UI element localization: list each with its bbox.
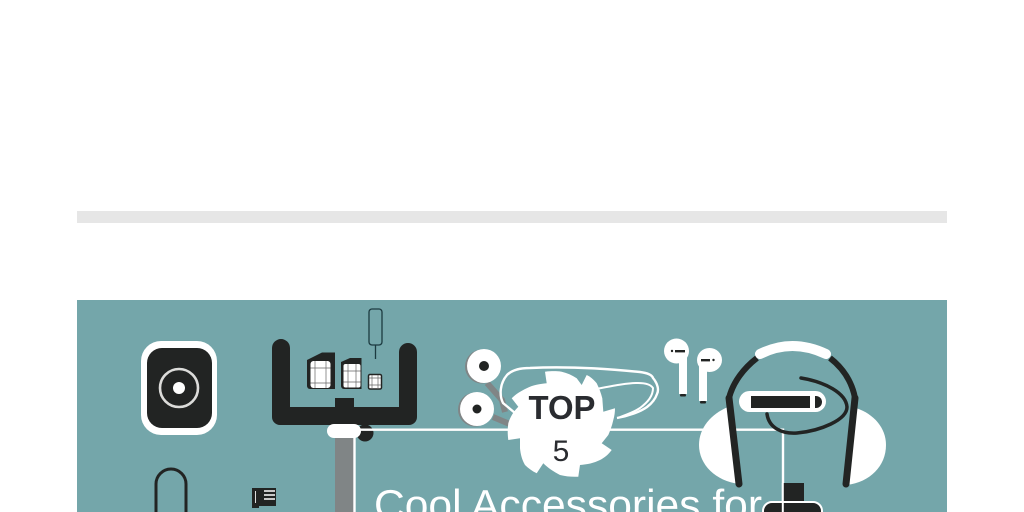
icon: USB connector <box>763 483 822 512</box>
icon: camera lens <box>141 341 217 435</box>
icon: earphones <box>458 349 658 426</box>
icon: SIM cards <box>307 352 382 389</box>
icon: micro SD card <box>252 488 276 508</box>
icon: SIM eject pin <box>369 309 382 359</box>
icon: headphones <box>699 346 886 485</box>
frame lines <box>354 430 783 512</box>
teal panel <box>77 300 947 512</box>
icon: selfie stick <box>272 339 417 512</box>
icon: paper clip <box>156 469 186 512</box>
badge: TOP 5: 5 <box>553 435 569 468</box>
grey divider bar <box>77 211 947 223</box>
badge: TOP 5 <box>508 371 615 477</box>
icon: wireless earbuds <box>664 338 722 404</box>
badge: TOP 5: TOP <box>528 389 596 426</box>
